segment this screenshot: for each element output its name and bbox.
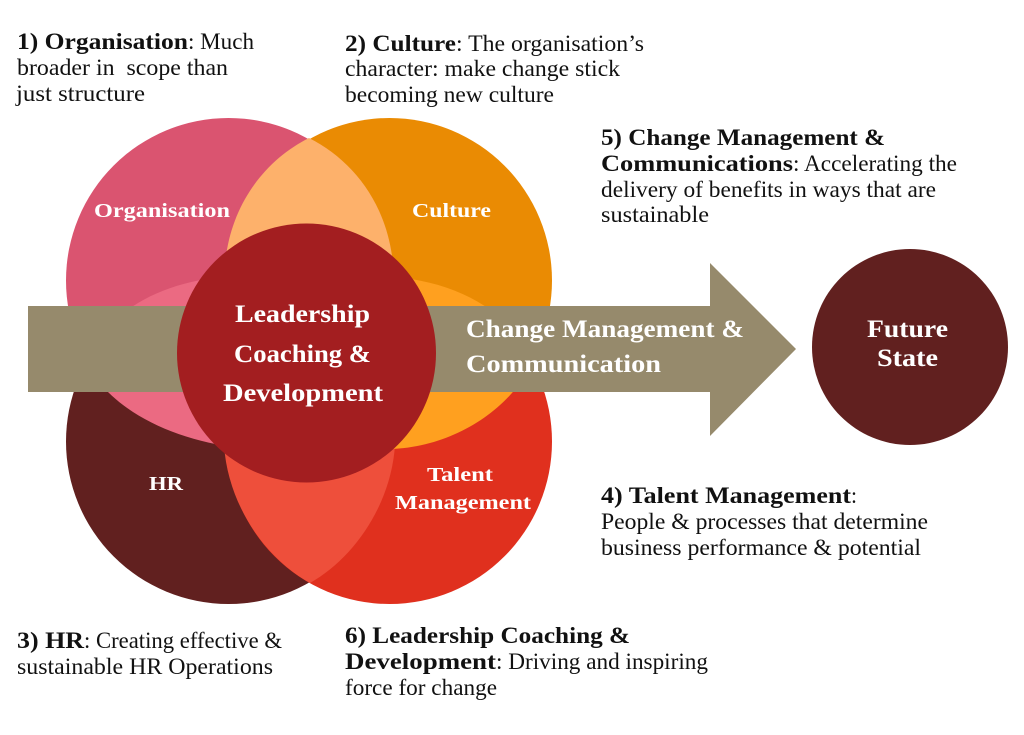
text block: 2) Culture: becoming new culture <box>345 82 554 107</box>
label: HR: HR <box>149 473 184 495</box>
label: Change Management & Communication: Communication <box>466 351 661 378</box>
circle: Culture <box>227 118 552 443</box>
label: Leadership Coaching & Development: Coaching & <box>234 341 371 368</box>
text block: 2) Culture: : The organisation’s <box>456 31 644 56</box>
circle: Future State <box>812 249 1008 445</box>
overlap: organisation and HR <box>85 276 240 448</box>
text block: 4) Talent Management <box>601 483 928 560</box>
text block: 5) Change Management & Communications <box>601 125 957 227</box>
text block: 5) Change Management & Communications: delivery of benefits in ways that are <box>601 177 936 202</box>
circle: Organisation <box>66 118 391 443</box>
text block: 2) Culture: character: make change stick <box>345 56 621 81</box>
label: Organisation: Organisation <box>94 200 230 222</box>
label: Talent Management <box>395 464 531 514</box>
text block: 6) Leadership Coaching & Development: 6) Leadership Coaching & <box>345 623 630 648</box>
overlap: organisation and culture <box>225 138 393 265</box>
text block: 3) HR: 3) HR <box>17 628 84 653</box>
text block: 1) Organisation: just structure <box>15 81 145 106</box>
label: Change Management & Communication: Change Management & <box>466 316 744 343</box>
text block: 4) Talent Management: People & processes that determine <box>601 509 928 534</box>
label: Culture: Culture <box>412 200 491 222</box>
circle: leadership centre <box>177 224 436 482</box>
text block: 4) Talent Management: : <box>851 483 857 508</box>
text block: 1) Organisation: : Much <box>188 29 254 54</box>
text block: 1) Organisation: 1) Organisation <box>17 29 188 54</box>
text block: 5) Change Management & Communications: sustainable <box>601 202 709 227</box>
text block: 3) HR <box>17 628 282 679</box>
label: Talent Management: Management <box>395 492 531 514</box>
text block: 3) HR: : Creating effective & <box>84 628 282 653</box>
label: Leadership Coaching & Development: Leadership <box>235 301 370 328</box>
circle: Future State: State <box>877 345 938 372</box>
text block: 4) Talent Management: business performance & potential <box>601 535 921 560</box>
text block: 5) Change Management & Communications: Communications <box>601 151 793 176</box>
text block: 1) Organisation <box>15 29 254 106</box>
circle: Future State: Future <box>867 316 948 343</box>
venn diagram <box>66 118 552 604</box>
label: Talent Management: Talent <box>427 464 493 486</box>
text block: 6) Leadership Coaching & Development: force for change <box>345 675 497 700</box>
overlap: HR and talent <box>224 445 395 583</box>
text block: 6) Leadership Coaching & Development <box>345 623 708 700</box>
arrow: change management <box>28 263 796 436</box>
label: Change Management & Communication <box>466 316 744 378</box>
overlap: culture and talent <box>378 276 533 449</box>
text block: 6) Leadership Coaching & Development: : Driving and inspiring <box>496 649 708 674</box>
text block: 3) HR: sustainable HR Operations <box>17 654 273 679</box>
label: Leadership Coaching & Development: Development <box>223 380 384 407</box>
text block: 6) Leadership Coaching & Development: Development <box>345 649 496 674</box>
text block: 4) Talent Management: 4) Talent Management <box>601 483 851 508</box>
text block: 5) Change Management & Communications: 5) Change Management & <box>601 125 885 150</box>
text block: 2) Culture: 2) Culture <box>345 31 456 56</box>
circle: Talent Management <box>227 279 552 604</box>
circle: HR <box>66 279 391 604</box>
text block: 2) Culture <box>345 31 644 107</box>
text block: 5) Change Management & Communications: : Accelerating the <box>793 151 957 176</box>
text block: 1) Organisation: broader in scope than <box>17 55 229 80</box>
label: Leadership Coaching & Development <box>223 301 384 407</box>
